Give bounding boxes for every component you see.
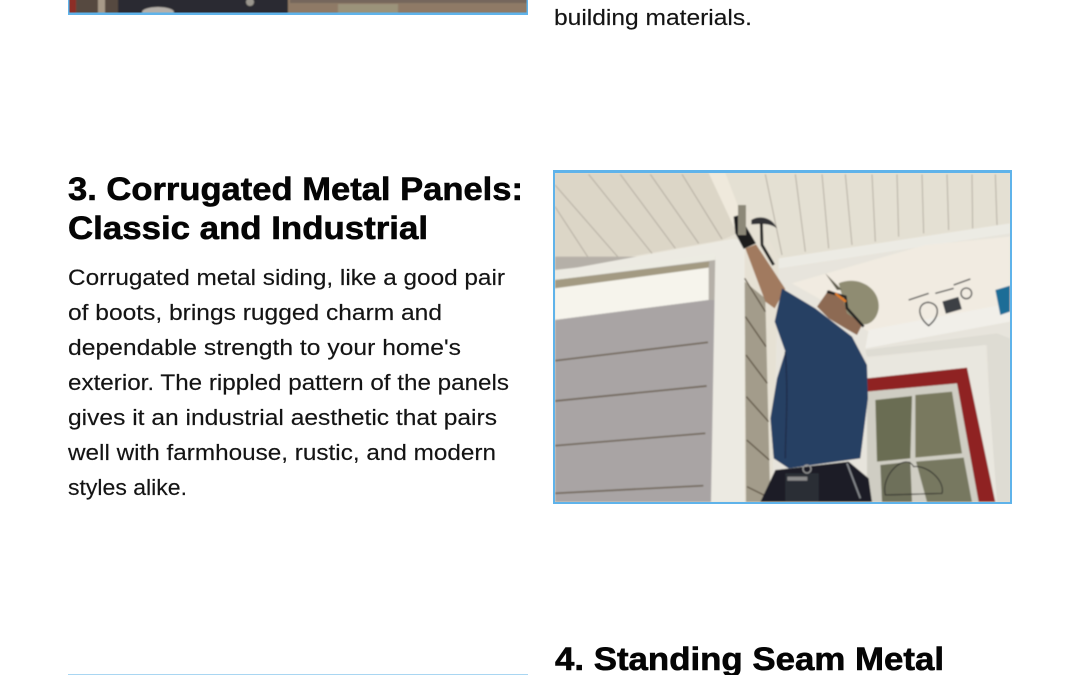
text block: corrugated metal description: of boots, brings rugged charm and <box>68 300 442 325</box>
door trim and window <box>865 333 1010 502</box>
shirt <box>770 288 868 468</box>
hammer <box>738 205 746 235</box>
glasses <box>827 292 864 327</box>
text block: corrugated metal description: Corrugated metal siding, like a good pair <box>68 265 505 290</box>
photo: previous section cropped at top <box>68 0 528 15</box>
text block: corrugated metal description: well with farmhouse, rustic, and modern <box>67 440 496 465</box>
text block: corrugated metal description: dependable strength to your home's <box>68 335 461 360</box>
heading: 3. Corrugated Metal Panels <box>68 171 523 246</box>
labels on wrap <box>909 279 970 326</box>
text block: corrugated metal description: gives it an industrial aesthetic that pairs <box>68 405 497 430</box>
left siding panel <box>555 256 716 301</box>
text block: corrugated metal description: styles alike. <box>68 475 187 500</box>
head <box>817 290 862 335</box>
heading: 3. Corrugated Metal Panels: 3. Corrugated Metal Panels: <box>68 171 523 207</box>
heading: 3. Corrugated Metal Panels: Classic and Industrial <box>68 210 428 246</box>
text: end of previous paragraph: building materials. <box>554 5 752 30</box>
cap <box>839 281 879 324</box>
white corner trim <box>581 240 744 502</box>
text block: corrugated metal description <box>67 265 509 500</box>
gloved hand <box>734 215 756 249</box>
wall <box>772 225 1010 502</box>
photo: worker hammering siding under a porch ceiling <box>553 170 1012 504</box>
arm <box>745 244 785 308</box>
side siding strip <box>745 282 770 502</box>
tool belt <box>760 462 872 502</box>
photo: next section top border <box>68 674 528 675</box>
ceiling <box>552 165 1017 510</box>
text block: corrugated metal description: exterior. The rippled pattern of the panels <box>68 370 509 395</box>
